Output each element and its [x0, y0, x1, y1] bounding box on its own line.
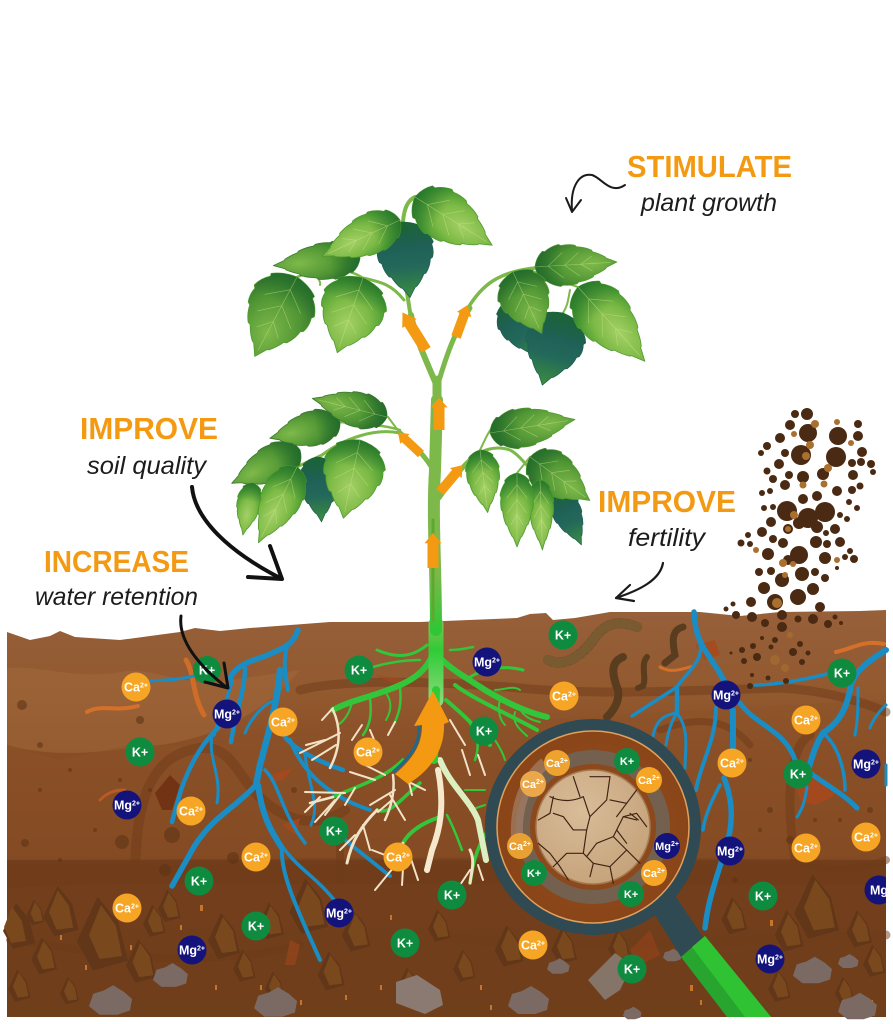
Ca badge: Ca — [794, 714, 810, 728]
Mg badge: Mg — [326, 906, 344, 920]
Mg badge — [712, 680, 740, 710]
Ca badge in lens — [636, 767, 662, 793]
heading: stimulate plant growth — [627, 149, 792, 217]
Mg badge: Mg — [474, 656, 492, 670]
heading: improve soil quality — [80, 411, 218, 480]
orange stem arrows — [393, 302, 475, 568]
heading: increase water retention: water retention — [35, 583, 198, 611]
K+ badge: K+ — [790, 768, 806, 782]
Ca badge in lens: 2+ — [657, 868, 665, 875]
nutrient badges — [112, 620, 893, 984]
K+ badge in lens — [618, 881, 644, 907]
heading: increase water retention: INCREASE — [44, 544, 189, 579]
K+ badge: K+ — [326, 824, 342, 838]
Ca badge: 2+ — [810, 844, 818, 850]
Ca badge: 2+ — [195, 806, 203, 814]
K+ badge: K+ — [755, 890, 771, 904]
K+ badge — [390, 928, 420, 958]
Mg badge in lens: Mg — [655, 841, 671, 853]
Ca badge in lens — [507, 833, 533, 859]
heading: improve soil quality: soil quality — [87, 452, 208, 480]
Mg badge clipped at right edge: Mg — [870, 884, 888, 898]
K+ badge — [242, 912, 270, 940]
Ca badge — [718, 748, 746, 778]
Mg badge — [472, 648, 502, 676]
cream rootlets — [300, 708, 485, 890]
buried rocks — [3, 874, 886, 1007]
Ca badge — [354, 738, 382, 766]
Ca badge: 2+ — [287, 718, 295, 724]
K+ badge in lens: K+ — [624, 889, 638, 901]
heading: stimulate plant growth: STIMULATE — [627, 149, 792, 184]
K+ badge — [548, 620, 578, 650]
Mg badge: 2+ — [197, 946, 205, 952]
Mg badge: 2+ — [735, 846, 743, 854]
Ca badge: Ca — [854, 830, 870, 844]
Ca badge in lens: Ca — [638, 775, 652, 787]
magnifying glass — [485, 719, 771, 1017]
Ca badge: 2+ — [736, 758, 744, 766]
Ca badge — [268, 708, 298, 736]
Ca badge: Ca — [794, 842, 810, 856]
Mg badge: 2+ — [731, 690, 739, 698]
Ca badge: 2+ — [131, 904, 139, 910]
K+ badge: K+ — [444, 888, 460, 902]
Ca badge: Ca — [720, 756, 736, 770]
Mg badge clipped at right edge — [864, 876, 886, 904]
Mg badge — [178, 936, 206, 964]
K+ badge — [184, 866, 214, 896]
Mg badge: Mg — [713, 688, 731, 702]
Ca badge — [112, 894, 142, 922]
Ca badge: Ca — [521, 938, 537, 952]
taproot — [427, 770, 441, 870]
K+ badge — [470, 716, 498, 746]
green lateral roots — [333, 645, 547, 883]
K+ badge in lens: K+ — [527, 868, 541, 880]
K+ badge: K+ — [476, 724, 492, 738]
Ca badge: Ca — [115, 902, 131, 916]
Ca badge — [792, 706, 820, 734]
K+ badge — [320, 816, 348, 846]
K+ badge in lens — [521, 860, 547, 886]
panel: soil cross-section — [3, 610, 886, 1019]
Mg badge near arrow — [212, 700, 242, 728]
Ca badge: Ca — [124, 680, 140, 694]
falling fertilizer particles — [724, 408, 876, 689]
leaves: front layer — [225, 175, 665, 552]
Ca badge: 2+ — [140, 682, 148, 690]
Ca badge: 2+ — [372, 748, 380, 754]
Mg badge: Mg — [114, 798, 132, 812]
K+ badge in lens: K+ — [620, 756, 634, 768]
heading: improve fertility: IMPROVE — [598, 484, 736, 519]
K+ badge: K+ — [624, 962, 640, 976]
Ca badge: 2+ — [537, 940, 545, 948]
orange specks — [60, 905, 873, 1010]
Ca badge in lens: 2+ — [536, 779, 544, 786]
dry cracked soil — [536, 770, 650, 884]
K+ badge — [748, 882, 778, 910]
Mg badge: 2+ — [492, 658, 500, 664]
Ca badge: Ca — [386, 850, 402, 864]
K+ badge: K+ — [199, 664, 215, 678]
Ca badge: Ca — [552, 690, 568, 704]
Mg badge: Mg — [179, 944, 197, 958]
K+ badge: K+ — [834, 666, 850, 680]
Ca badge — [550, 682, 578, 710]
Ca badge in lens — [520, 771, 546, 797]
K+ badge — [784, 760, 812, 788]
dark particles — [724, 408, 876, 689]
Ca badge in lens — [641, 860, 667, 886]
big growth arrow in roots — [393, 691, 449, 784]
Ca badge: Ca — [356, 746, 372, 760]
K+ badge: K+ — [191, 874, 207, 888]
K+ badge in lens — [614, 748, 640, 774]
Ca badge: Ca — [271, 716, 287, 730]
heading: improve fertility — [598, 484, 736, 552]
K+ badge — [618, 954, 646, 984]
K+ badge: K+ — [397, 936, 413, 950]
K+ badge: K+ — [132, 746, 148, 760]
Ca badge in lens: Ca — [546, 758, 560, 770]
light particles — [753, 419, 854, 672]
K+ badge — [126, 738, 154, 766]
Mg badge — [756, 944, 784, 974]
Ca badge in lens: 2+ — [523, 841, 531, 848]
heading: improve soil quality: IMPROVE — [80, 411, 218, 446]
Ca badge: 2+ — [568, 692, 576, 698]
K+ badge: K+ — [555, 628, 571, 642]
Ca badge — [384, 842, 412, 872]
Mg badge — [324, 898, 354, 928]
Ca badge — [518, 930, 548, 960]
Ca badge — [242, 842, 270, 872]
Mg badge: 2+ — [775, 954, 783, 962]
grey stones — [89, 949, 877, 1019]
worms — [87, 623, 884, 800]
heading: increase water retention — [35, 544, 198, 611]
blue water roots: right — [632, 612, 886, 928]
Mg badge near arrow: 2+ — [232, 710, 240, 716]
K+ badge: K+ — [248, 920, 264, 934]
Ca badge: 2+ — [870, 832, 878, 840]
Ca badge — [176, 796, 206, 826]
plant stem and branches — [297, 197, 578, 630]
Mg badge in lens — [654, 833, 680, 859]
Ca badge in lens: Ca — [643, 868, 657, 880]
Ca badge: 2+ — [402, 852, 410, 860]
handle — [653, 894, 771, 1017]
red mineral patches — [155, 640, 835, 965]
heading: stimulate plant growth: plant growth — [640, 189, 777, 217]
Ca badge — [792, 834, 820, 862]
arrow: soil quality — [192, 487, 282, 579]
Mg badge: Mg — [757, 952, 775, 966]
Mg badge in lens: 2+ — [671, 841, 679, 848]
K+ badge: K+ — [351, 664, 367, 678]
Ca badge — [122, 672, 150, 702]
Mg badge — [112, 790, 142, 820]
lens rim — [485, 719, 701, 935]
K+ badge — [344, 656, 374, 684]
Ca badge: 2+ — [810, 716, 818, 722]
Mg badge: 2+ — [344, 908, 352, 916]
leaves: back layer — [223, 219, 595, 551]
Mg badge — [852, 750, 880, 778]
plant roots — [300, 624, 547, 890]
Mg badge: 2+ — [132, 800, 140, 808]
K+ badge — [828, 658, 856, 688]
K+ badge — [438, 880, 466, 910]
Mg badge: 2+ — [871, 760, 879, 766]
Mg badge: Mg — [853, 758, 871, 772]
Ca badge in lens — [544, 750, 570, 776]
Mg badge near arrow: Mg — [214, 708, 232, 722]
heading: improve fertility: fertility — [628, 524, 707, 552]
Ca badge: Ca — [179, 804, 195, 818]
Ca badge in lens: Ca — [509, 841, 523, 853]
Mg badge: Mg — [717, 844, 735, 858]
Ca badge: 2+ — [260, 852, 268, 860]
arrow: water retention — [181, 616, 228, 688]
Ca badge: Ca — [244, 850, 260, 864]
soil speckles — [17, 700, 873, 883]
Mg badge — [716, 836, 744, 866]
blue water roots: left — [150, 630, 390, 960]
Ca badge in lens: 2+ — [560, 758, 568, 765]
Ca badge — [852, 822, 880, 852]
Ca badge in lens: Ca — [522, 779, 536, 791]
arrow: stimulate to plant — [566, 175, 625, 212]
Ca badge in lens: 2+ — [652, 775, 660, 782]
arrow: fertility — [616, 563, 663, 601]
K+ badge — [193, 656, 221, 684]
